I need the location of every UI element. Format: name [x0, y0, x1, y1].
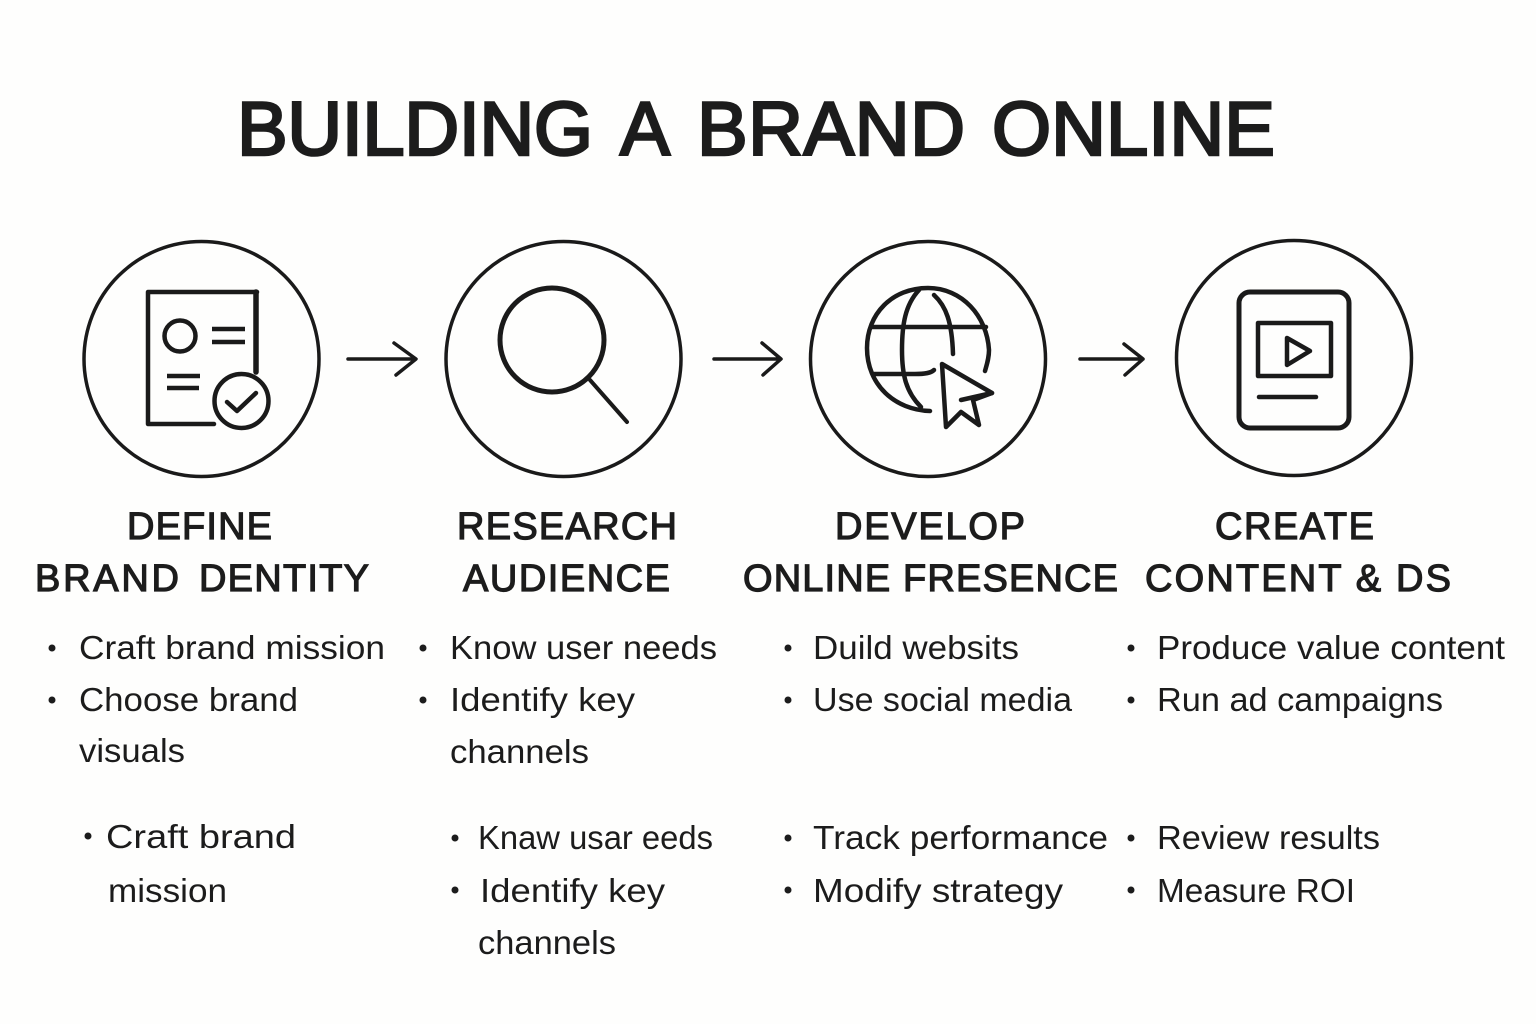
heading: create content and ads: CREATE: [1215, 506, 1374, 548]
bullet list: develop, lower: Modify strategy: [813, 872, 1064, 909]
arrow 3: [1080, 344, 1143, 375]
bullet list: define, upper: Choose brand: [79, 681, 298, 718]
heading: develop online presence: [743, 506, 1118, 600]
bullet list: create, upper: [1128, 629, 1505, 718]
bullet list: research, upper: Identify key: [450, 681, 636, 718]
bullet list: research, lower: Identify key: [480, 872, 666, 909]
bullet list: research, upper: [420, 629, 717, 770]
bullet list: develop, upper: [784, 629, 1073, 718]
heading: define brand identity: DEFINE: [127, 506, 272, 548]
bullet list: define, upper: Craft brand mission: [79, 629, 385, 666]
bullet list: create, lower: Review results: [1157, 819, 1380, 856]
bullet list: create, upper: Produce value content: [1157, 629, 1505, 666]
step 2: research audience: [420, 242, 717, 961]
arrow 2: [714, 343, 781, 375]
heading: develop online presence: DEVELOP: [835, 506, 1025, 548]
icon: magnifying glass: [446, 242, 681, 476]
bullet list: research, lower: channels: [478, 924, 616, 961]
heading: define brand identity: DENTITY: [199, 558, 369, 600]
heading: create content and ads: CONTENT & DS: [1145, 558, 1451, 600]
bullet list: research, lower: [452, 819, 713, 961]
bullet list: create, lower: [1128, 819, 1380, 909]
bullet list: create, lower: Measure ROI: [1157, 872, 1355, 909]
heading: create content and ads: [1145, 506, 1451, 600]
title: ONLINE: [992, 87, 1275, 172]
title: [237, 87, 1275, 172]
step 1: define brand identity: [35, 242, 385, 909]
heading: define brand identity: [35, 506, 369, 600]
step 3: develop online presence: [743, 242, 1118, 909]
heading: research audience: AUDIENCE: [463, 558, 670, 600]
step 4: create content and ads: [1128, 240, 1505, 909]
title: BRAND: [697, 87, 965, 172]
icon: tablet with video player: [1176, 240, 1412, 476]
bullet list: develop, lower: Track performance: [813, 819, 1108, 856]
title: A: [620, 87, 670, 172]
bullet list: define, lower: mission: [108, 872, 227, 909]
icon: document with check badge: [84, 242, 319, 476]
bullet list: research, upper: channels: [450, 733, 589, 770]
bullet list: define, lower: [84, 818, 296, 909]
heading: define brand identity: BRAND: [35, 558, 179, 600]
heading: research audience: [457, 506, 677, 600]
bullet list: develop, lower: [784, 819, 1108, 909]
heading: research audience: RESEARCH: [457, 506, 677, 548]
bullet list: develop, upper: Duild websits: [813, 629, 1019, 666]
arrow 1: [348, 343, 416, 375]
bullet list: define, upper: [48, 629, 385, 769]
bullet list: define, upper: visuals: [79, 732, 185, 769]
bullet list: research, upper: Know user needs: [450, 629, 717, 666]
icon: globe with cursor: [810, 242, 1046, 476]
bullet list: create, upper: Run ad campaigns: [1157, 681, 1443, 718]
heading: develop online presence: ONLINE FRESENCE: [743, 558, 1118, 600]
bullet list: research, lower: Knaw usar eeds: [478, 819, 713, 856]
bullet list: develop, upper: Use social media: [813, 681, 1073, 718]
bullet list: define, lower: Craft brand: [106, 818, 296, 855]
title: BUILDING: [237, 87, 593, 172]
